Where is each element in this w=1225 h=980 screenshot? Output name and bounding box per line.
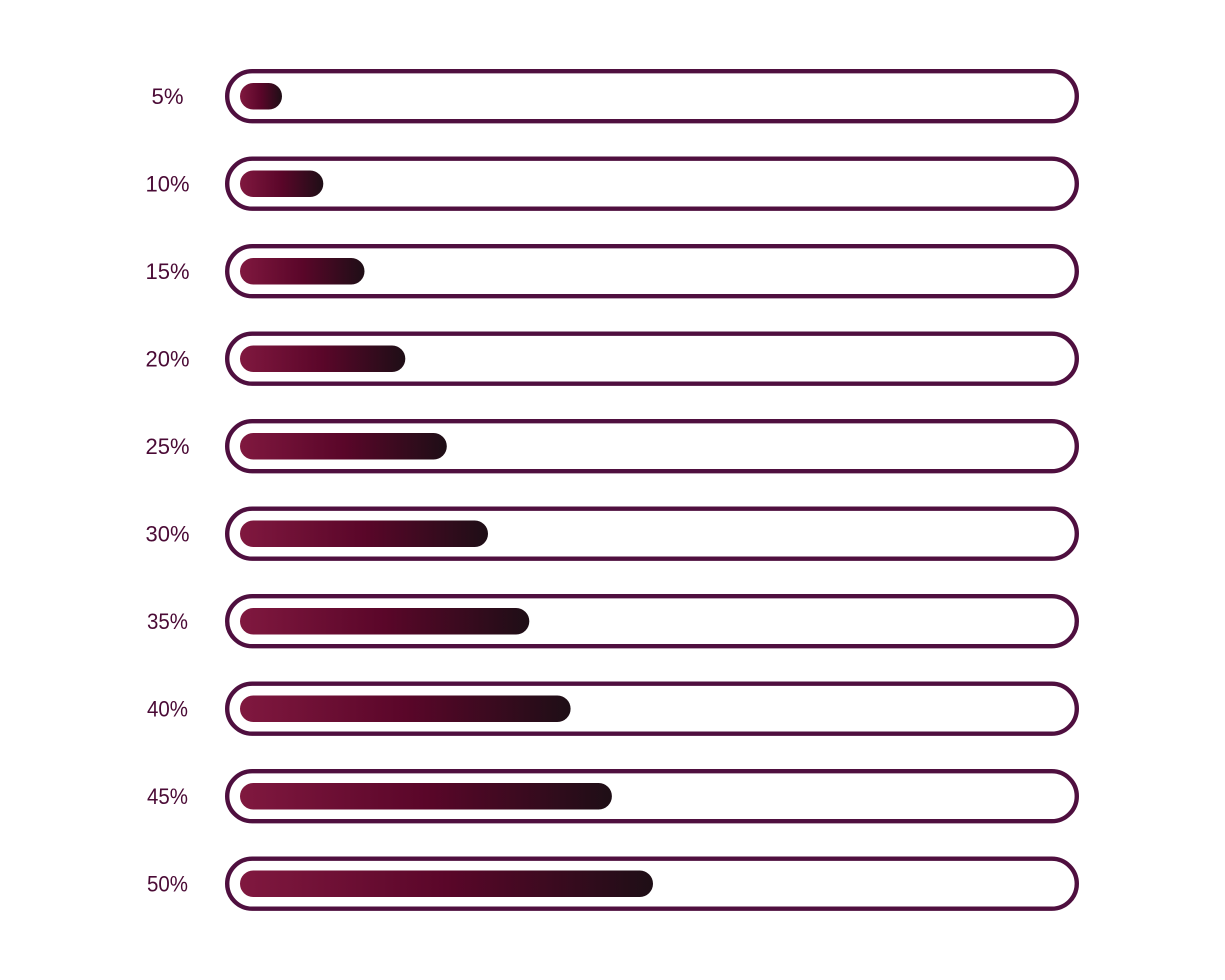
row: 10% (146, 159, 1077, 209)
track: 30% (227, 509, 1077, 559)
row: 40% (147, 684, 1077, 734)
track: 35% (227, 596, 1077, 646)
row: 25% (146, 421, 1077, 471)
track: 45% (227, 771, 1077, 821)
label: 20%: 20% (146, 346, 190, 372)
fill: 30% (240, 520, 488, 547)
fill: 40% (240, 696, 571, 722)
label: 50%: 50% (147, 872, 188, 896)
track: 5% (227, 71, 1077, 121)
row: 5% (152, 71, 1077, 121)
track: 20% (227, 334, 1077, 384)
row: 15% (146, 246, 1077, 296)
row: 50% (147, 859, 1077, 909)
fill: 45% (240, 783, 612, 810)
label: 25%: 25% (146, 434, 190, 459)
label: 40%: 40% (147, 696, 188, 722)
track: 50% (227, 859, 1077, 909)
label: 45%: 45% (147, 784, 188, 809)
row: 45% (147, 771, 1077, 821)
label: 10%: 10% (146, 172, 190, 196)
fill: 20% (240, 346, 405, 372)
track: 15% (227, 246, 1077, 296)
fill: 15% (240, 258, 364, 284)
label: 15%: 15% (146, 259, 190, 284)
fill: 25% (240, 433, 447, 460)
row: 35% (147, 596, 1077, 646)
fill: 50% (240, 870, 653, 897)
track: 25% (227, 421, 1077, 471)
row: 30% (146, 509, 1077, 559)
fill: 10% (240, 170, 323, 197)
label: 5%: 5% (152, 84, 184, 109)
track: 40% (227, 684, 1077, 734)
label: 30%: 30% (146, 522, 190, 546)
fill: 35% (240, 608, 529, 634)
label: 35%: 35% (147, 609, 188, 634)
fill: 5% (240, 83, 282, 110)
row: 20% (146, 334, 1077, 384)
track: 10% (227, 159, 1077, 209)
